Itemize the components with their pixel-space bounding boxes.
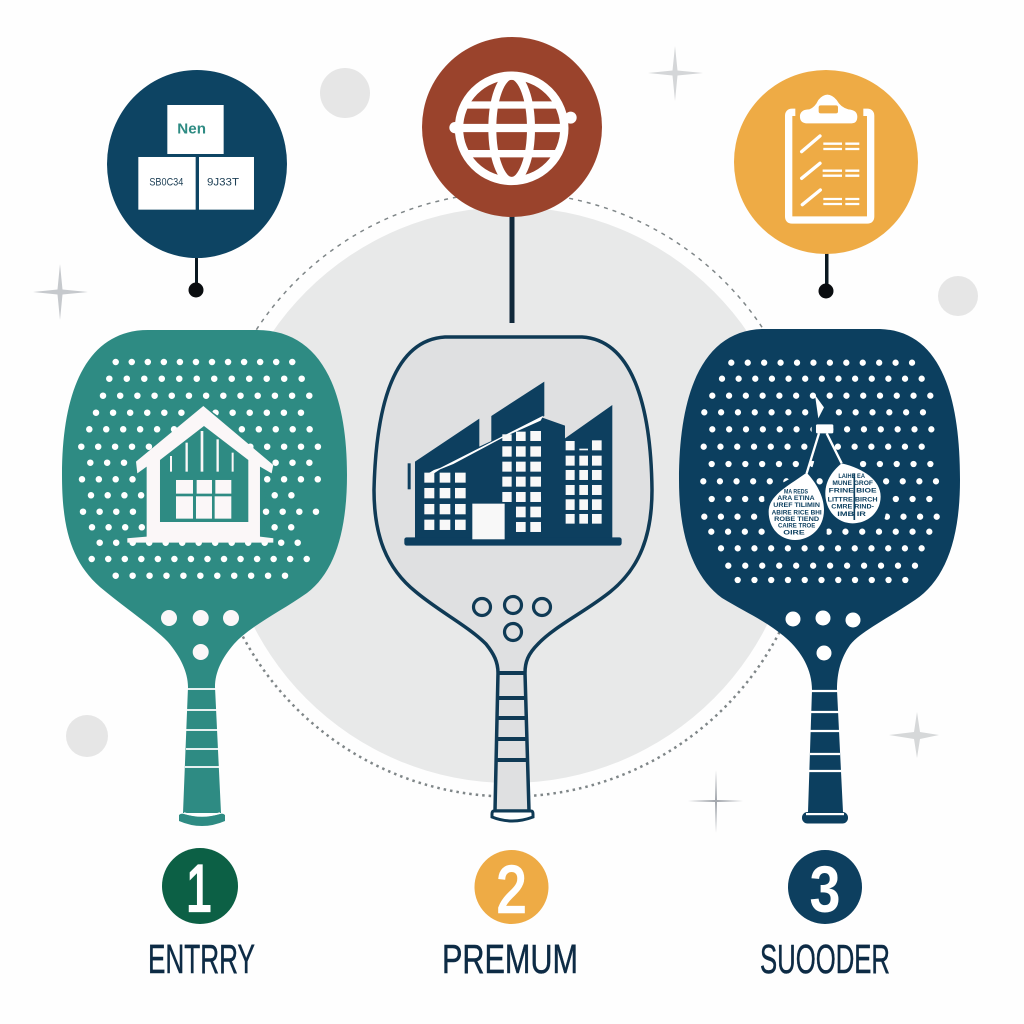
dot grid — [81, 362, 318, 576]
tier 3 label: SUOODER — [760, 936, 890, 982]
paddle body — [62, 330, 347, 813]
tier 3 number badge: 3 — [810, 852, 840, 926]
circle icon: org boxes: 9J33T — [207, 176, 239, 188]
paddle 3: suooder — [679, 329, 960, 824]
decorative circles — [66, 68, 978, 757]
decorative sparkles — [33, 46, 939, 833]
icon: twin rackets — [764, 395, 887, 542]
butt cap — [179, 813, 225, 826]
tier 1 number badge — [162, 848, 238, 925]
circle icon: globe — [422, 37, 602, 217]
icon: twin rackets: IMB IR — [837, 511, 866, 518]
circle icon: org boxes: Nen — [177, 121, 206, 137]
tier 2 number badge: 2 — [496, 852, 526, 926]
dashed orbit ring — [237, 192, 783, 797]
icon: twin rackets: OIRE — [783, 529, 805, 536]
connector: right — [818, 252, 834, 298]
background grey circle — [222, 207, 798, 783]
icon: twin rackets: MA REDS — [784, 488, 808, 495]
icon: twin rackets: LAIHE EA — [838, 473, 865, 480]
dot grid — [703, 363, 937, 580]
paddle 2: premium — [374, 337, 652, 821]
icon: twin rackets: ROBE TIEND — [774, 516, 819, 523]
icon: twin rackets: CAIRE TROE — [778, 522, 816, 529]
connector: left — [188, 255, 204, 298]
icon: twin rackets: MUNE GROF — [832, 480, 873, 487]
paddle body — [679, 329, 960, 812]
tier 1 number badge: 1 — [186, 851, 212, 925]
icon: twin rackets: LITTRE BIRCH — [828, 496, 878, 503]
grip stripes — [809, 691, 841, 771]
icon: house — [127, 403, 273, 543]
icon: twin rackets: UREF TILIMIN — [773, 502, 820, 509]
icon: factory buildings — [404, 382, 622, 546]
grip rungs — [496, 673, 527, 760]
grip stripes — [185, 689, 219, 767]
paddle 1: entry — [62, 330, 347, 826]
paddle outline — [374, 337, 652, 811]
icon: twin rackets: CMRE RIND- — [831, 503, 874, 510]
butt cap — [492, 811, 533, 821]
circle icon: clipboard — [734, 70, 918, 254]
paddle holes — [161, 610, 239, 660]
tier 2 number badge — [474, 850, 548, 926]
tier 3 number badge — [788, 850, 862, 926]
connector: middle — [510, 215, 514, 323]
icon: twin rackets: ABIRE RICE BHI — [772, 510, 822, 517]
paddle holes — [786, 610, 860, 660]
icon: twin rackets: ARA ETINA — [777, 495, 815, 502]
paddle holes — [474, 596, 550, 640]
circle icon: org boxes: SB0C34 — [149, 176, 183, 188]
butt cap — [802, 812, 848, 824]
tier 1 label: ENTRRY — [148, 936, 255, 982]
icon: twin rackets: FRINE BIOE — [829, 487, 877, 494]
tier 2 label: PREMUM — [442, 936, 578, 982]
circle icon: org boxes — [107, 70, 287, 258]
